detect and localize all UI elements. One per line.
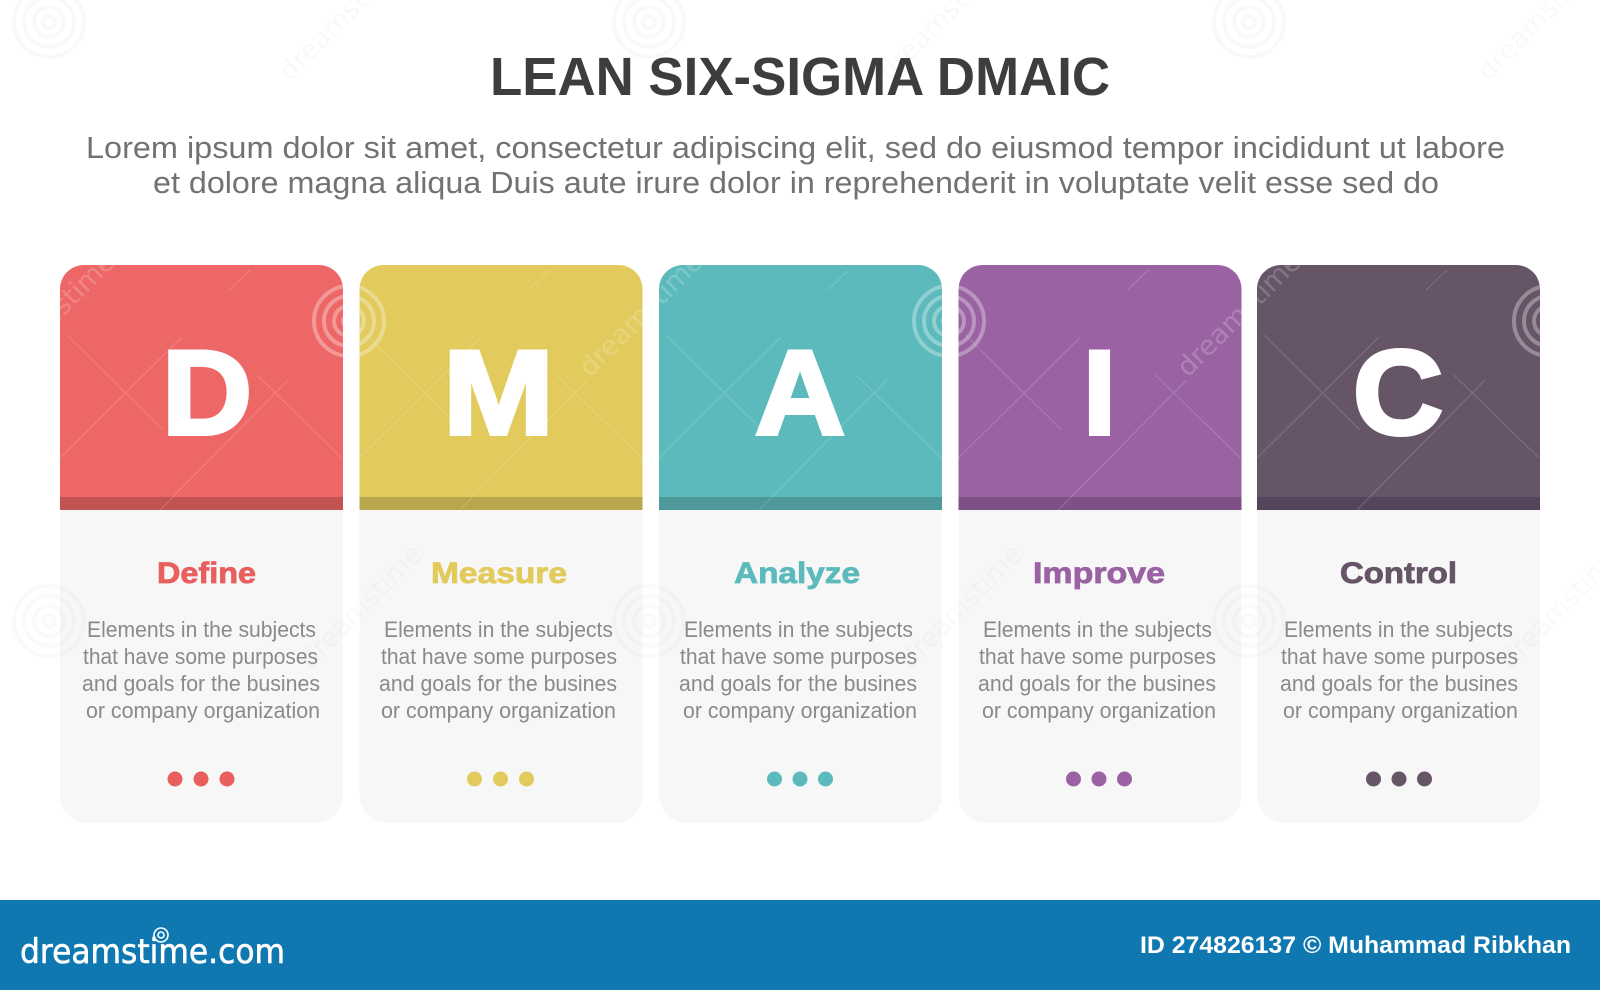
description: measure: and goals for the busines <box>379 671 617 696</box>
dots: improve <box>1066 772 1132 786</box>
dots: control <box>1366 772 1432 786</box>
description: control: that have some purposes <box>1281 644 1518 669</box>
description: analyze: that have some purposes <box>680 644 917 669</box>
control body card <box>1257 505 1540 823</box>
description: measure: or company organization <box>381 698 616 723</box>
text: dreamstime <box>1171 246 1308 383</box>
description: measure: that have some purposes <box>381 644 617 669</box>
description: improve <box>978 617 1216 723</box>
description: improve: or company organization <box>982 698 1216 723</box>
define body card <box>60 505 343 823</box>
description: define <box>82 617 320 723</box>
description: define: or company organization <box>86 698 320 723</box>
description: measure <box>379 617 617 723</box>
description: improve: that have some purposes <box>979 644 1216 669</box>
measure header block <box>360 265 642 510</box>
letter I: I <box>1083 326 1116 460</box>
heading: Control: Control <box>1340 557 1457 590</box>
measure body card <box>360 505 642 823</box>
description: measure: Elements in the subjects <box>384 617 613 642</box>
panel: analyze <box>659 265 942 823</box>
improve header block <box>958 265 1242 510</box>
heading: Analyze: Analyze <box>734 557 860 590</box>
footer banner <box>0 900 1600 990</box>
dots: measure <box>467 772 534 786</box>
panel: improve <box>958 265 1242 823</box>
description: improve: and goals for the busines <box>978 671 1216 696</box>
dots: analyze <box>767 772 833 786</box>
panel: control <box>1257 265 1540 823</box>
logo: dreamstime.com: dreamstime.com <box>20 932 285 972</box>
title: LEAN SIX-SIGMA DMAIC <box>490 47 1110 107</box>
description: analyze: Elements in the subjects <box>684 617 913 642</box>
subtitle text block: Lorem ipsum dolor sit amet, consectetur adipiscing elit, sed do eiusmod tempor incididunt ut labore <box>86 130 1505 165</box>
description: define: and goals for the busines <box>82 671 320 696</box>
subtitle text block <box>86 130 1505 200</box>
letter D: D <box>162 326 252 460</box>
description: control: Elements in the subjects <box>1284 617 1513 642</box>
panel: measure <box>360 265 642 823</box>
control header block <box>1257 265 1540 510</box>
subtitle text block: et dolore magna aliqua Duis aute irure dolor in reprehenderit in voluptate velit esse sed do <box>153 165 1439 200</box>
letter M: M <box>443 326 554 460</box>
text: dreamstime <box>893 538 1030 675</box>
heading: Improve: Improve <box>1033 557 1165 590</box>
letter A: A <box>755 326 845 460</box>
description: define: that have some purposes <box>83 644 318 669</box>
improve body card <box>958 505 1242 823</box>
heading: Define: Define <box>157 557 256 590</box>
analyze header block <box>659 265 942 510</box>
text: dreamstime <box>573 246 710 383</box>
description: improve: Elements in the subjects <box>983 617 1212 642</box>
define header block <box>60 265 343 510</box>
description: define: Elements in the subjects <box>87 617 316 642</box>
image id and credit: ID 274826137 © Muhammad Ribkhan <box>1140 932 1571 959</box>
description: analyze: or company organization <box>683 698 917 723</box>
heading: Measure: Measure <box>431 557 567 590</box>
analyze body card <box>659 505 942 823</box>
panel: define <box>60 265 343 823</box>
dots: define <box>168 772 234 786</box>
description: analyze <box>679 617 917 723</box>
description: control <box>1280 617 1518 723</box>
description: analyze: and goals for the busines <box>679 671 917 696</box>
text: dreamstime <box>293 538 430 675</box>
description: control: and goals for the busines <box>1280 671 1518 696</box>
description: control: or company organization <box>1283 698 1518 723</box>
letter C: C <box>1353 326 1443 460</box>
